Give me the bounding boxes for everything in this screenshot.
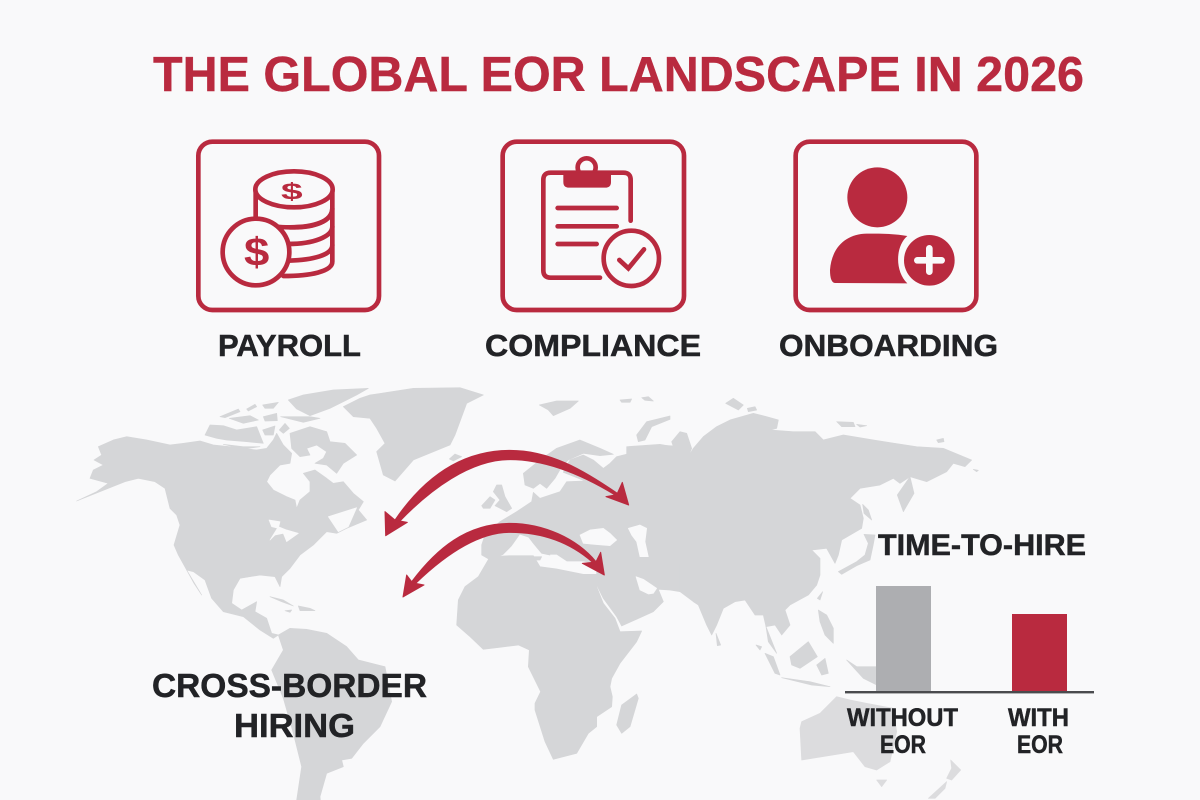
label: compliance: COMPLIANCE [485,328,701,363]
label: onboarding: ONBOARDING [779,328,998,363]
label: without EOR: WITHOUT [847,704,958,732]
icon: payroll coins: $ [281,179,303,205]
Black Sea [580,528,617,546]
label: with EOR: EOR [1017,731,1063,759]
world map [77,388,978,800]
label: payroll: PAYROLL [218,328,361,363]
panel: onboarding [779,142,998,363]
label: cross-border hiring [152,667,427,744]
upper arrow [385,450,629,536]
label: with EOR: WITH [1008,704,1069,732]
icon: clipboard with check [503,142,684,310]
panel: compliance [485,142,701,363]
Persian Gulf [636,577,657,594]
Australia [800,697,897,770]
Italy [528,537,550,555]
label: cross-border hiring: CROSS-BORDER [152,667,427,704]
axis line [845,691,1094,693]
icon: payroll coins [198,142,379,310]
panel: payroll [198,142,379,363]
label: with EOR [1008,704,1069,759]
label: cross-border hiring: HIRING [234,707,355,744]
chart title: TIME-TO-HIRE [878,529,1086,562]
icon: payroll coins: $ [244,231,269,275]
bar: without EOR [876,586,931,692]
label: without EOR [847,704,958,759]
bar: with EOR [1012,614,1067,692]
arrows: cross-border flows [385,450,629,597]
Gulf of St Lawrence [328,508,357,532]
Mediterranean Sea [492,535,600,578]
label: without EOR: EOR [880,731,926,759]
title: THE GLOBAL EOR LANDSCAPE IN 2026 [153,47,1084,102]
Caspian Sea [628,525,648,557]
bar chart: time-to-hire [845,529,1094,759]
lower arrow [403,523,604,597]
icon: person with plus [796,142,976,310]
